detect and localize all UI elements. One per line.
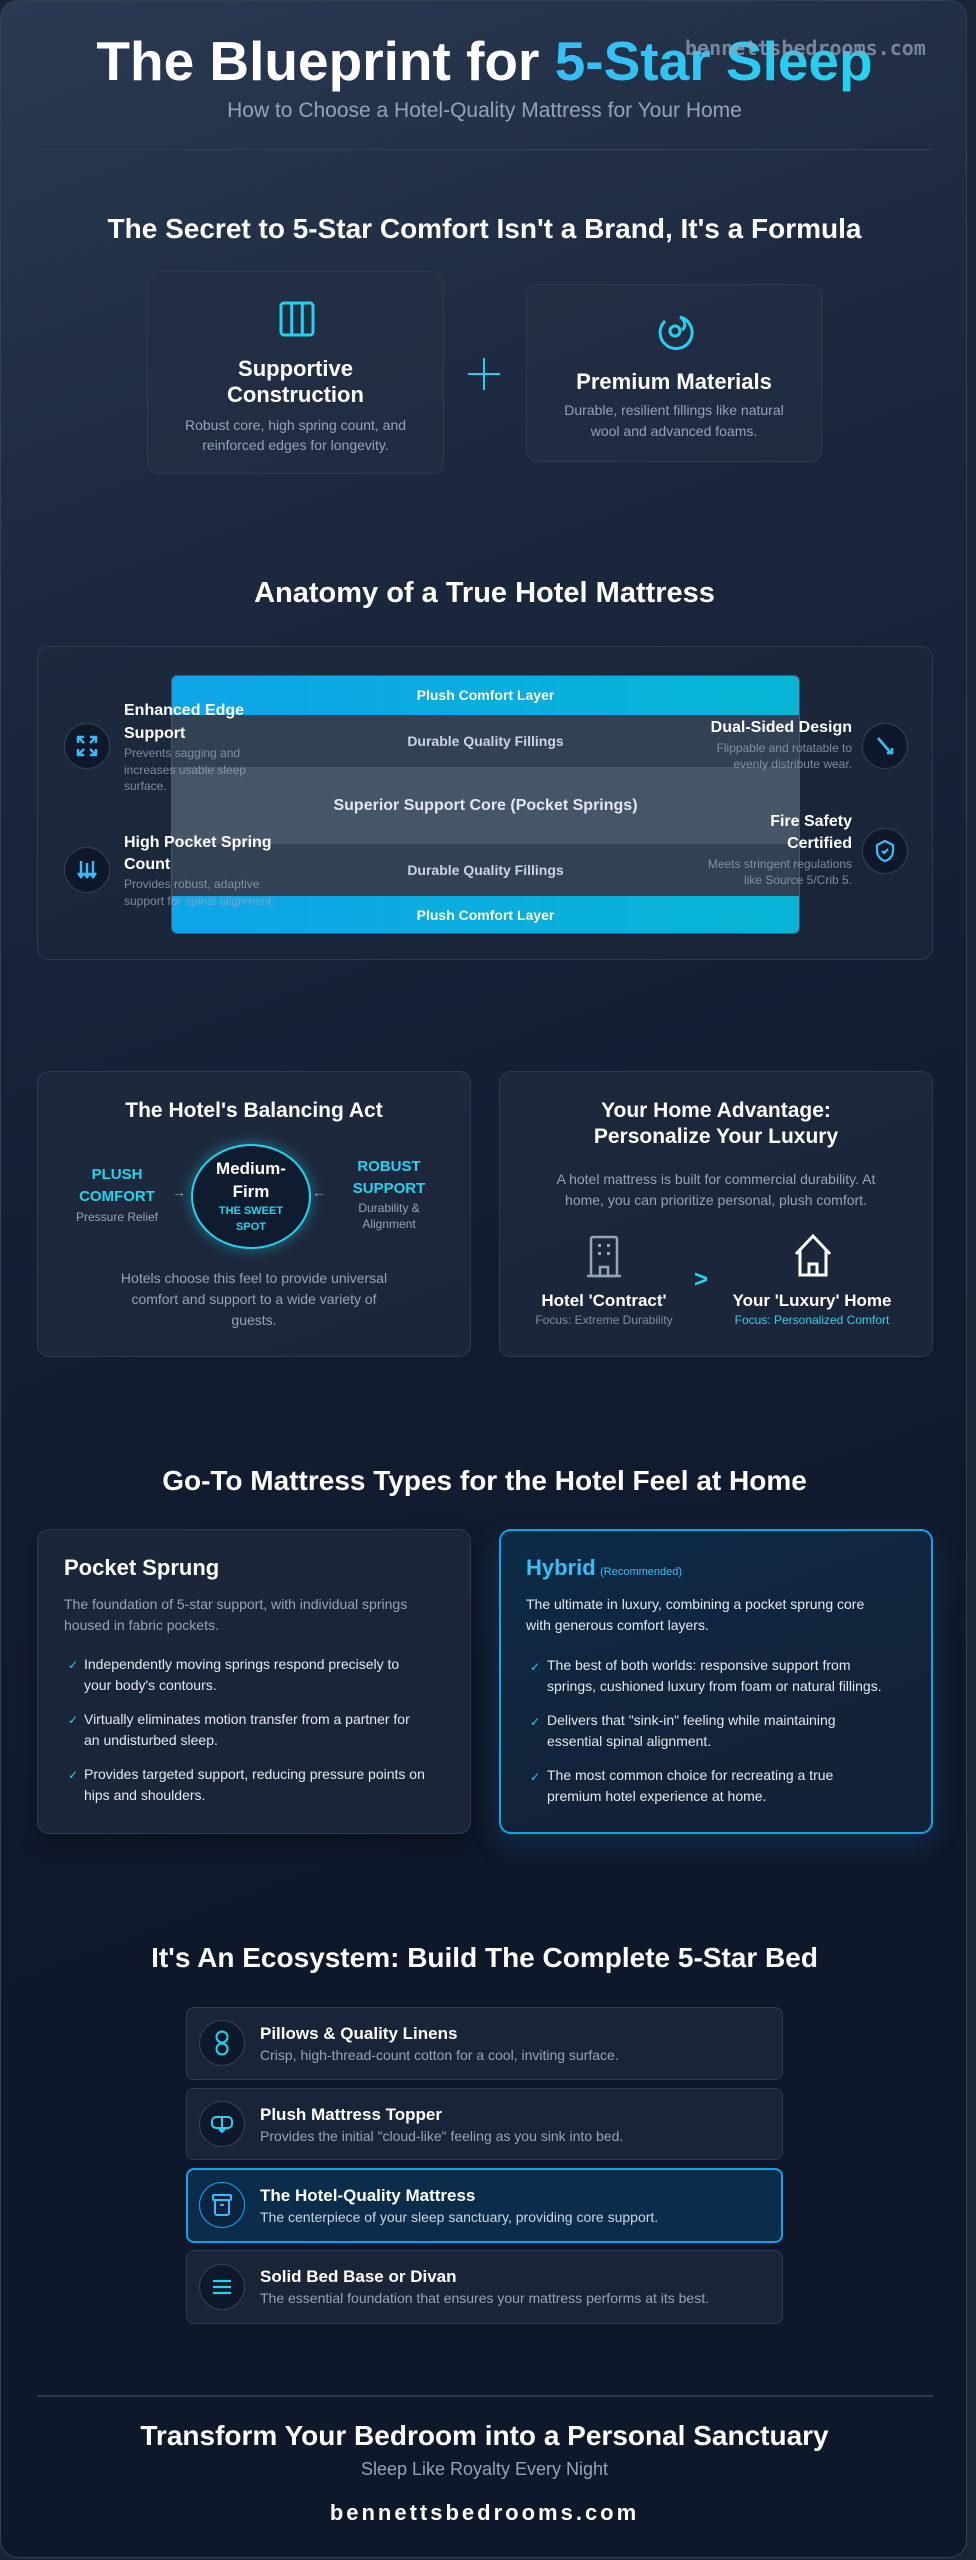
bullet list: ✓ xyxy=(530,1715,540,1729)
icon: topper xyxy=(199,2101,245,2147)
bullet list xyxy=(530,1657,882,1804)
feature: spring count: High Pocket Spring xyxy=(124,834,272,851)
layer: fillings bottom xyxy=(172,844,799,896)
bullet list: ✓ xyxy=(530,1660,540,1674)
icon: base xyxy=(199,2264,245,2310)
bullet list: Virtually eliminates motion transfer from a partner for xyxy=(84,1711,410,1727)
sweet spot circle xyxy=(191,1144,311,1249)
label: robust support: ROBUST xyxy=(357,1158,421,1175)
feature: fire safety: Fire Safety xyxy=(770,813,852,830)
sweet spot circle: THE SWEET xyxy=(219,1205,283,1217)
card text: reinforced edges for longevity. xyxy=(202,437,389,453)
text xyxy=(121,1270,387,1328)
layer: plush bottom xyxy=(172,896,799,935)
item: topper: Plush Mattress Topper xyxy=(260,2105,442,2124)
item: mattress (highlighted): The Hotel-Quality Mattress xyxy=(260,2186,475,2205)
label: plush comfort: PLUSH xyxy=(92,1166,142,1183)
feature: spring count: support for spinal alignment. xyxy=(124,894,275,908)
label: robust support: Durability & xyxy=(358,1201,420,1215)
heading: anatomy: Anatomy of a True Hotel Mattress xyxy=(254,577,715,609)
bullet list: ✓ xyxy=(530,1770,540,1784)
icon: pillows xyxy=(199,2020,245,2066)
card: pocket sprung: housed in fabric pockets. xyxy=(64,1617,219,1633)
label: hotel: Hotel 'Contract' xyxy=(541,1291,667,1310)
item: pillows: Pillows & Quality Linens xyxy=(260,2024,457,2043)
subtitle: How to Choose a Hotel-Quality Mattress for Your Home xyxy=(227,99,742,122)
text: A hotel mattress is built for commercial durability. At xyxy=(557,1171,875,1187)
bullet list: springs, cushioned luxury from foam or natural fillings. xyxy=(547,1678,882,1694)
item: bed base: The essential foundation that ensures your mattress performs at its best. xyxy=(260,2290,709,2306)
footer heading: Transform Your Bedroom into a Personal Sanctuary xyxy=(140,2420,829,2451)
bullet list: Delivers that "sink-in" feeling while maintaining xyxy=(547,1712,836,1728)
label: home: Your 'Luxury' Home xyxy=(733,1291,891,1310)
card: hybrid: Hybrid (Recommended) xyxy=(526,1555,682,1580)
text xyxy=(556,1171,876,1208)
heading xyxy=(594,1099,838,1148)
icon: flip xyxy=(862,723,908,769)
layer: core: Superior Support Core (Pocket Springs) xyxy=(333,797,638,814)
label: robust support: SUPPORT xyxy=(353,1180,425,1197)
card: hybrid: The ultimate in luxury, combining a pocket sprung core xyxy=(526,1596,864,1612)
feature: spring count xyxy=(64,834,275,908)
feature: fire safety: Certified xyxy=(787,835,852,852)
card: pocket sprung: The foundation of 5-star support, with individual springs xyxy=(64,1596,407,1612)
feature: dual sided xyxy=(711,719,908,771)
card text: wool and advanced foams. xyxy=(591,423,757,439)
arrow left: ← xyxy=(312,1184,326,1200)
icon: building xyxy=(587,1236,621,1278)
layer: plush top xyxy=(172,676,799,715)
card text xyxy=(564,402,784,439)
text: Hotels choose this feel to provide universal xyxy=(121,1270,387,1286)
bullet list: hips and shoulders. xyxy=(84,1787,205,1803)
title: The Blueprint for 5-Star Sleep xyxy=(96,30,873,92)
bullet list: your body's contours. xyxy=(84,1677,217,1693)
item: bed base xyxy=(186,2250,783,2324)
bullet list: essential spinal alignment. xyxy=(547,1733,711,1749)
sweet spot circle: SPOT xyxy=(236,1221,266,1233)
arrow: > xyxy=(694,1266,708,1293)
item: mattress (highlighted) xyxy=(186,2168,783,2243)
label: home: Focus: Personalized Comfort xyxy=(735,1313,889,1327)
card title: Construction xyxy=(227,382,364,407)
layer: plush bottom: Plush Comfort Layer xyxy=(417,907,554,923)
bullet list xyxy=(68,1656,425,1803)
card text: Durable, resilient fillings like natural xyxy=(564,402,784,418)
heading: The Hotel's Balancing Act xyxy=(125,1099,383,1122)
feature: edge support: Prevents sagging and xyxy=(124,746,240,760)
label: plush comfort xyxy=(76,1166,158,1224)
bullet list: ✓ xyxy=(68,1768,78,1782)
feature: edge support: surface. xyxy=(124,779,167,793)
layer: fillings bottom: Durable Quality Fillings xyxy=(407,862,564,878)
label: plush comfort: Pressure Relief xyxy=(76,1210,158,1224)
bullet list: The most common choice for recreating a true xyxy=(547,1767,833,1783)
panel: anatomy xyxy=(37,646,933,960)
card: hybrid xyxy=(499,1529,933,1834)
bullet list: Independently moving springs respond precisely to xyxy=(84,1656,399,1672)
bullet list: an undisturbed sleep. xyxy=(84,1732,218,1748)
feature: edge support xyxy=(64,702,246,793)
bullet list: ✓ xyxy=(68,1713,78,1727)
card: premium materials xyxy=(526,284,822,462)
mattress diagram xyxy=(171,675,800,934)
bullet list: ✓ xyxy=(68,1658,78,1672)
watermark: bennettsbedrooms.com xyxy=(685,36,926,60)
item: pillows xyxy=(186,2007,783,2080)
label: hotel: Focus: Extreme Durability xyxy=(535,1313,673,1327)
icon: shield xyxy=(862,828,908,874)
card: hybrid: with generous comfort layers. xyxy=(526,1617,709,1633)
icon: plus xyxy=(468,358,500,390)
card title xyxy=(227,356,364,407)
bullet list: Provides targeted support, reducing pressure points on xyxy=(84,1766,425,1782)
bullet list: The best of both worlds: responsive support from xyxy=(547,1657,850,1673)
card: pocket sprung xyxy=(37,1529,471,1834)
feature: fire safety: like Source 5/Crib 5. xyxy=(744,873,852,887)
label: plush comfort: COMFORT xyxy=(79,1188,155,1205)
text: comfort and support to a wide variety of xyxy=(131,1291,377,1307)
card text xyxy=(185,417,406,453)
layer: fillings xyxy=(172,715,799,767)
icon: spiral xyxy=(658,316,694,350)
panel: balancing act xyxy=(37,1071,471,1357)
feature: edge support: increases usable sleep xyxy=(124,762,246,776)
footer url: bennettsbedrooms.com xyxy=(330,2500,639,2525)
heading: Your Home Advantage: xyxy=(601,1099,831,1122)
text: guests. xyxy=(231,1312,277,1328)
feature: dual sided: Dual-Sided Design xyxy=(711,719,852,736)
label: robust support: Alignment xyxy=(362,1217,416,1231)
layer: core xyxy=(172,767,799,844)
sweet spot circle: Firm xyxy=(233,1182,269,1201)
feature: dual sided: evenly distribute wear. xyxy=(733,757,852,771)
sweet spot circle: Medium- xyxy=(216,1159,286,1178)
card: supportive construction xyxy=(147,271,444,474)
label: robust support xyxy=(353,1158,426,1231)
card title: Supportive xyxy=(238,356,353,381)
feature: edge support: Support xyxy=(124,725,185,742)
icon: expand xyxy=(64,723,110,769)
feature: dual sided: Flippable and rotatable to xyxy=(717,741,852,755)
item: bed base: Solid Bed Base or Divan xyxy=(260,2267,456,2286)
feature: spring count: Provides robust, adaptive xyxy=(124,877,259,891)
heading: mattress types: Go-To Mattress Types for the Hotel Feel at Home xyxy=(162,1465,807,1496)
feature: fire safety: Meets stringent regulations xyxy=(708,857,852,871)
icon: columns xyxy=(280,302,314,336)
heading: ecosystem: It's An Ecosystem: Build The Complete 5-Star Bed xyxy=(151,1942,818,1973)
item: topper xyxy=(186,2088,783,2160)
footer subtitle: Sleep Like Royalty Every Night xyxy=(361,2459,608,2479)
card text: Robust core, high spring count, and xyxy=(185,417,406,433)
heading: Personalize Your Luxury xyxy=(594,1125,838,1148)
item: pillows: Crisp, high-thread-count cotton for a cool, inviting surface. xyxy=(260,2047,619,2063)
icon: wavy arrows xyxy=(64,847,110,893)
layer: plush top: Plush Comfort Layer xyxy=(417,687,554,703)
icon: house xyxy=(795,1234,831,1276)
label: home xyxy=(732,1291,891,1327)
feature: spring count: Count xyxy=(124,856,170,873)
icon: mattress xyxy=(199,2182,245,2228)
item: topper: Provides the initial "cloud-like" feeling as you sink into bed. xyxy=(260,2128,623,2144)
item: mattress (highlighted): The centerpiece of your sleep sanctuary, providing core support. xyxy=(260,2209,658,2225)
card title: Premium Materials xyxy=(576,369,772,394)
layer: fillings: Durable Quality Fillings xyxy=(407,733,564,749)
arrow right: → xyxy=(172,1184,186,1200)
feature: edge support: Enhanced Edge xyxy=(124,702,244,719)
feature: fire safety xyxy=(708,813,908,887)
panel: home advantage xyxy=(499,1071,933,1357)
card: pocket sprung: Pocket Sprung xyxy=(64,1555,219,1580)
label: hotel xyxy=(535,1291,673,1327)
heading: formula: The Secret to 5-Star Comfort Isn't a Brand, It's a Formula xyxy=(108,213,861,244)
bullet list: premium hotel experience at home. xyxy=(547,1788,766,1804)
text: home, you can prioritize personal, plush comfort. xyxy=(565,1192,867,1208)
